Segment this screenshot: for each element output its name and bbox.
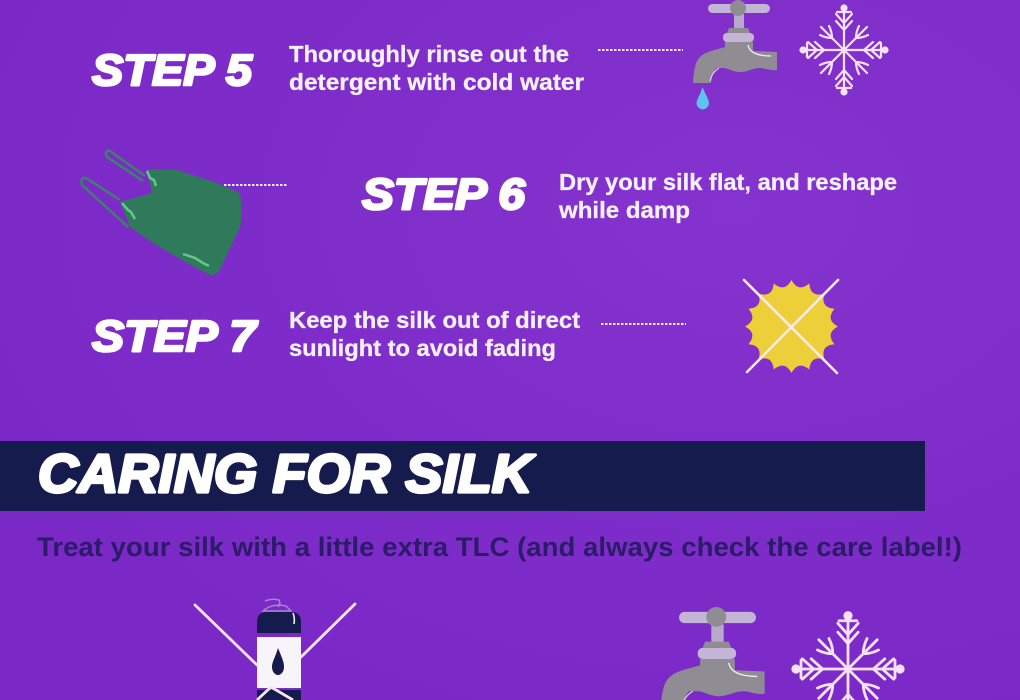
section subtitle: Treat your silk with a little extra TLC (and always check the care label!) [37,532,962,562]
step 7 heading: STEP 7 [92,312,259,361]
icon: water drop [696,87,709,109]
step 5 description: detergent with cold water [289,69,584,95]
icon: cold water tap [660,607,765,700]
step 5 description: Thoroughly rinse out the [289,41,569,67]
step 5 heading: STEP 5 [92,46,253,95]
icon: cold snowflake [793,612,903,700]
step 6 heading: STEP 6 [362,170,526,219]
icon: green silk face mask [82,151,242,275]
icon: crossed-out detergent bottle [195,599,355,700]
icon: crossed-out sun [744,280,838,373]
icon: snowflake [800,6,888,94]
step 7 description: sunlight to avoid fading [289,335,556,361]
step 6 description: while damp [558,197,690,223]
icon: dripping tap [693,0,777,109]
section banner: caring for silk [0,441,925,511]
step 7 description: Keep the silk out of direct [289,307,580,333]
step 6 description: Dry your silk flat, and reshape [559,169,897,195]
banner title: CARING FOR SILK [38,444,536,504]
